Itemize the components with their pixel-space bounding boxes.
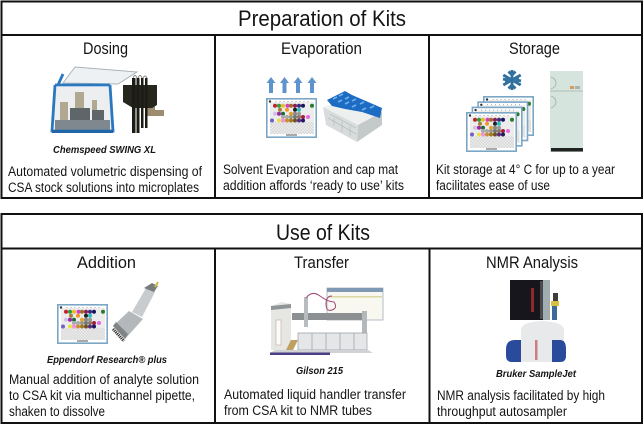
description: NMR analysis: throughput autosampler — [437, 404, 567, 419]
description: transfer: from CSA kit to NMR tubes — [224, 403, 372, 418]
section frame — [2, 2, 642, 198]
icon: snowflake — [503, 70, 521, 90]
heading: addition: Addition — [77, 253, 136, 272]
description: dosing — [8, 164, 202, 195]
description: storage — [436, 162, 615, 193]
description: evaporation: addition affords ‘ready to use’ kits — [223, 178, 404, 193]
description: evaporation — [223, 162, 404, 193]
description: storage: Kit storage at 4° C for up to a year — [436, 162, 615, 177]
heading: transfer: Transfer — [294, 253, 349, 272]
caption: Gilson 215: Gilson 215 — [296, 365, 343, 377]
icon: Bruker SampleJet NMR — [506, 280, 566, 362]
icon: plate with blue cap mat — [323, 91, 382, 142]
icon: stack of microplates — [467, 97, 533, 151]
description: dosing: Automated volumetric dispensing of — [8, 164, 202, 179]
description: transfer: Automated liquid handler transfer — [224, 387, 406, 402]
panel: storage — [436, 39, 615, 193]
icon: microplate — [58, 305, 107, 343]
panel: preparation of kits — [2, 2, 642, 198]
icon: multichannel pipette — [113, 282, 158, 341]
description: addition: shaken to dissolve — [9, 404, 105, 419]
heading: dosing: Dosing — [83, 39, 128, 58]
heading: evaporation: Evaporation — [281, 39, 362, 58]
heading: storage: Storage — [509, 39, 560, 58]
title: use of kits: Use of Kits — [276, 220, 370, 245]
section frame — [2, 214, 642, 423]
panel: evaporation — [223, 39, 404, 193]
panel: addition — [9, 253, 199, 419]
description: addition: to CSA kit via multichannel pipette, — [9, 388, 195, 403]
icon: Chemspeed SWING XL robot — [52, 67, 164, 133]
title: preparation of kits: Preparation of Kits — [238, 6, 406, 31]
description: addition — [9, 372, 199, 419]
description: transfer — [224, 387, 406, 418]
caption: Chemspeed SWING XL: Chemspeed SWING XL — [53, 144, 156, 156]
icon: refrigerator — [550, 71, 583, 152]
description: storage: facilitates ease of use — [436, 178, 550, 193]
description: dosing: CSA stock solutions into microplates — [8, 180, 199, 195]
caption: Eppendorf Research plus: Eppendorf Research® plus — [47, 354, 167, 366]
panel: dosing — [8, 39, 202, 195]
caption: Bruker SampleJet: Bruker SampleJet — [496, 368, 576, 380]
description: evaporation: Solvent Evaporation and cap mat — [223, 162, 398, 177]
icon: microplate — [267, 99, 316, 137]
panel: transfer — [224, 253, 406, 418]
icon: Gilson 215 liquid handler — [270, 288, 383, 355]
panel: use of kits — [2, 214, 642, 423]
description: NMR analysis — [437, 388, 605, 419]
panel: NMR analysis — [437, 253, 605, 419]
description: addition: Manual addition of analyte solution — [9, 372, 199, 387]
heading: NMR analysis: NMR Analysis — [486, 253, 578, 272]
icon: evaporation arrows — [266, 77, 316, 93]
description: NMR analysis: NMR analysis facilitated by high — [437, 388, 605, 403]
